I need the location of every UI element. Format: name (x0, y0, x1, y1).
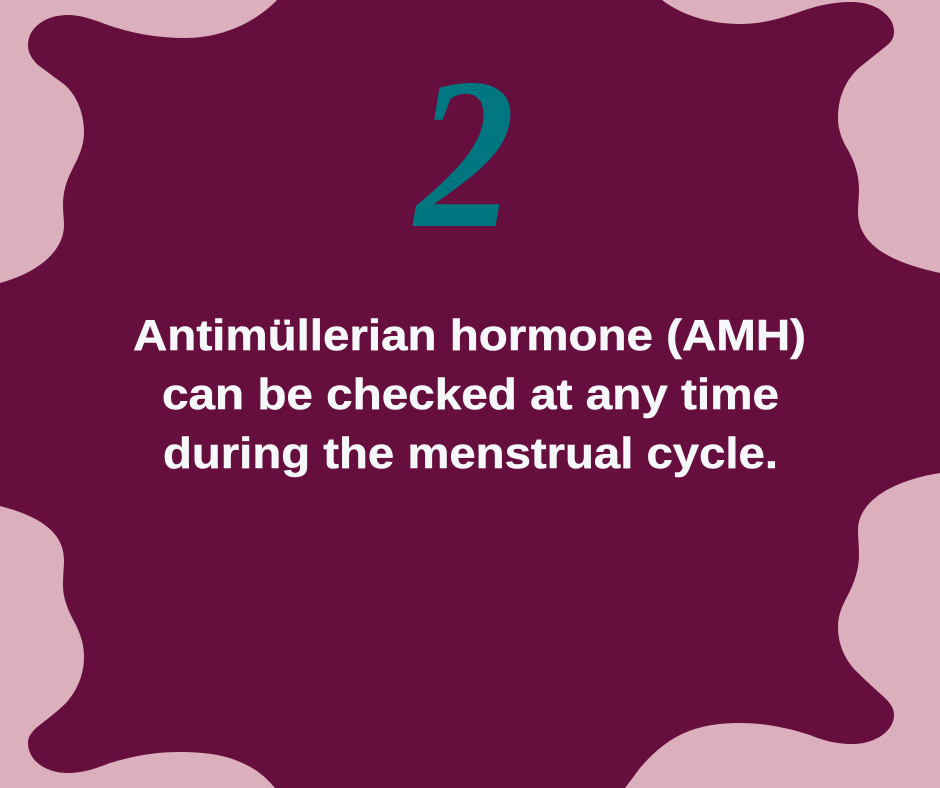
corner blob: bottom right (625, 473, 940, 788)
large numeral 2: 2 (412, 34, 515, 273)
corner blob: bottom left (0, 506, 275, 788)
corner blob: top right (662, 0, 940, 273)
headline line 3: during the menstrual cycle. (163, 429, 778, 478)
corner blob: top left (0, 0, 277, 283)
headline line 2: can be checked at any time (162, 370, 779, 419)
headline line 1: Antimüllerian hormone (AMH) (133, 311, 806, 360)
headline text (133, 311, 806, 478)
